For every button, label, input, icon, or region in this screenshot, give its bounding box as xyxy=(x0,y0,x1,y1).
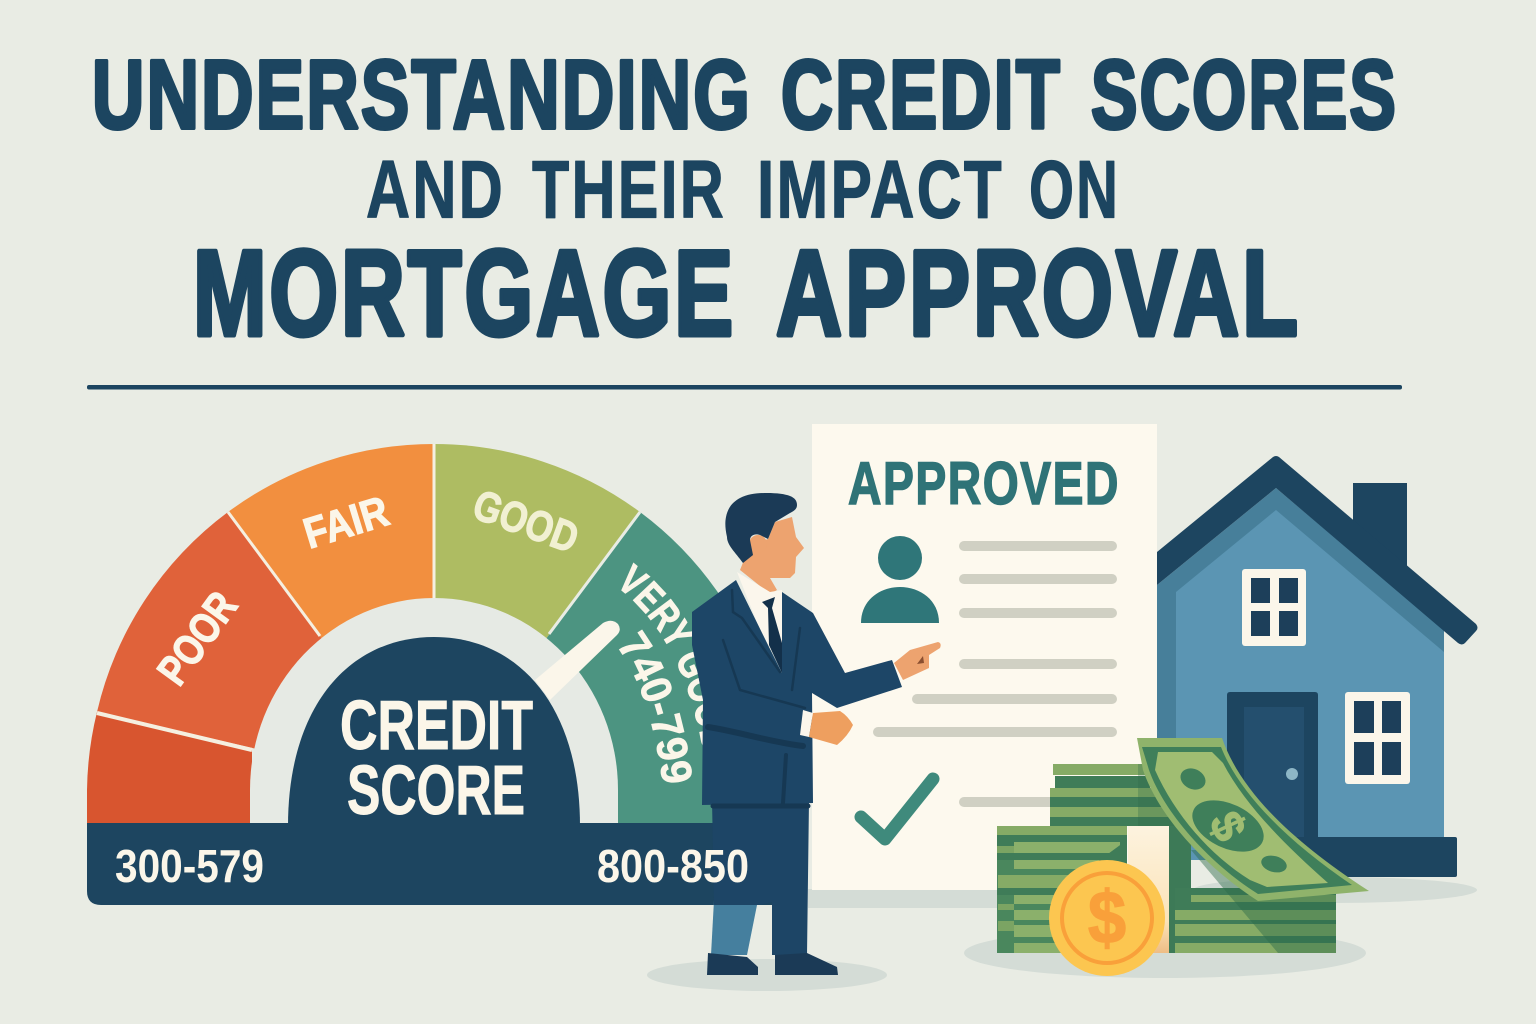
label: 740-799: 740-799 xyxy=(618,630,692,783)
gauge needle xyxy=(535,621,620,700)
house wall xyxy=(1176,510,1444,860)
roof xyxy=(1157,456,1478,644)
gauge base bar xyxy=(87,823,775,905)
icon: check mark xyxy=(861,779,933,839)
icon: person xyxy=(861,536,939,623)
title line 2: ON xyxy=(1029,144,1120,235)
label: score: SCORE xyxy=(347,751,525,829)
coin xyxy=(1049,860,1165,976)
shirt cuff xyxy=(800,710,813,737)
tie xyxy=(762,597,782,673)
title xyxy=(92,40,1398,361)
door xyxy=(1227,692,1318,877)
title line 2: THEIR xyxy=(532,144,726,235)
approval document xyxy=(808,424,1157,908)
gauge segment: poor xyxy=(97,512,434,790)
trousers xyxy=(712,800,809,955)
title line 2: IMPACT xyxy=(757,144,1004,235)
top window xyxy=(1242,569,1306,646)
title line 1: SCORES xyxy=(1091,40,1398,149)
stack divider xyxy=(1169,826,1191,953)
document shadow xyxy=(808,889,1038,908)
label: good: GOOD xyxy=(467,481,585,563)
cream box xyxy=(1128,826,1169,953)
gauge segment: fair xyxy=(228,444,434,790)
label: very good: VERY GOOD xyxy=(621,562,703,746)
gauge center dome xyxy=(288,637,580,826)
house shadow xyxy=(1193,877,1477,903)
resting hand xyxy=(809,711,853,745)
back stack of bills xyxy=(1050,764,1188,826)
pointing hand xyxy=(894,642,941,680)
range: 300-579: 300-579 xyxy=(115,840,264,892)
title line 1: UNDERSTANDING xyxy=(92,40,752,149)
foundation step xyxy=(1230,837,1457,877)
approved heading: APPROVED xyxy=(848,450,1120,517)
gauge segment: very good xyxy=(434,512,765,826)
right stack of bills xyxy=(1175,850,1336,953)
ear xyxy=(749,535,767,553)
ground shadow xyxy=(647,959,887,991)
left stack of bills xyxy=(997,826,1127,953)
hair xyxy=(725,493,797,563)
title line 1 xyxy=(92,40,1398,149)
right shoe xyxy=(775,953,838,975)
chimney xyxy=(1353,483,1407,575)
title line 3: MORTGAGE xyxy=(193,225,736,361)
lower window xyxy=(1345,692,1410,784)
jacket xyxy=(692,580,902,805)
title line 3: APPROVAL xyxy=(776,225,1301,361)
left trouser leg xyxy=(711,900,758,955)
left shoe xyxy=(707,953,758,975)
label: credit: CREDIT xyxy=(340,686,533,764)
range: 800-850: 800-850 xyxy=(597,840,749,892)
ground shadow xyxy=(964,928,1366,978)
neck and face xyxy=(740,517,804,594)
banknote dollar sign: $ xyxy=(1199,803,1257,849)
document text lines xyxy=(873,541,1117,807)
label: poor: POOR xyxy=(148,583,247,694)
gauge segment: good xyxy=(434,444,640,790)
house xyxy=(1157,456,1478,903)
title line 3 xyxy=(193,225,1301,361)
title line 2: AND xyxy=(366,144,505,235)
title line 2 xyxy=(366,144,1120,235)
gauge segment: lowest red xyxy=(87,712,252,826)
businessman xyxy=(647,493,941,991)
document sheet xyxy=(812,424,1157,890)
jacket folds xyxy=(708,590,808,806)
banknote xyxy=(1137,738,1369,901)
house wall shade xyxy=(1157,488,1444,860)
banknote seal xyxy=(1184,790,1272,862)
label: fair: FAIR xyxy=(298,487,394,558)
credit score gauge xyxy=(87,444,772,905)
title line 1: CREDIT xyxy=(781,40,1062,149)
coin dollar sign: $ xyxy=(1088,876,1126,959)
shirt xyxy=(737,572,783,650)
money pile xyxy=(964,738,1369,978)
